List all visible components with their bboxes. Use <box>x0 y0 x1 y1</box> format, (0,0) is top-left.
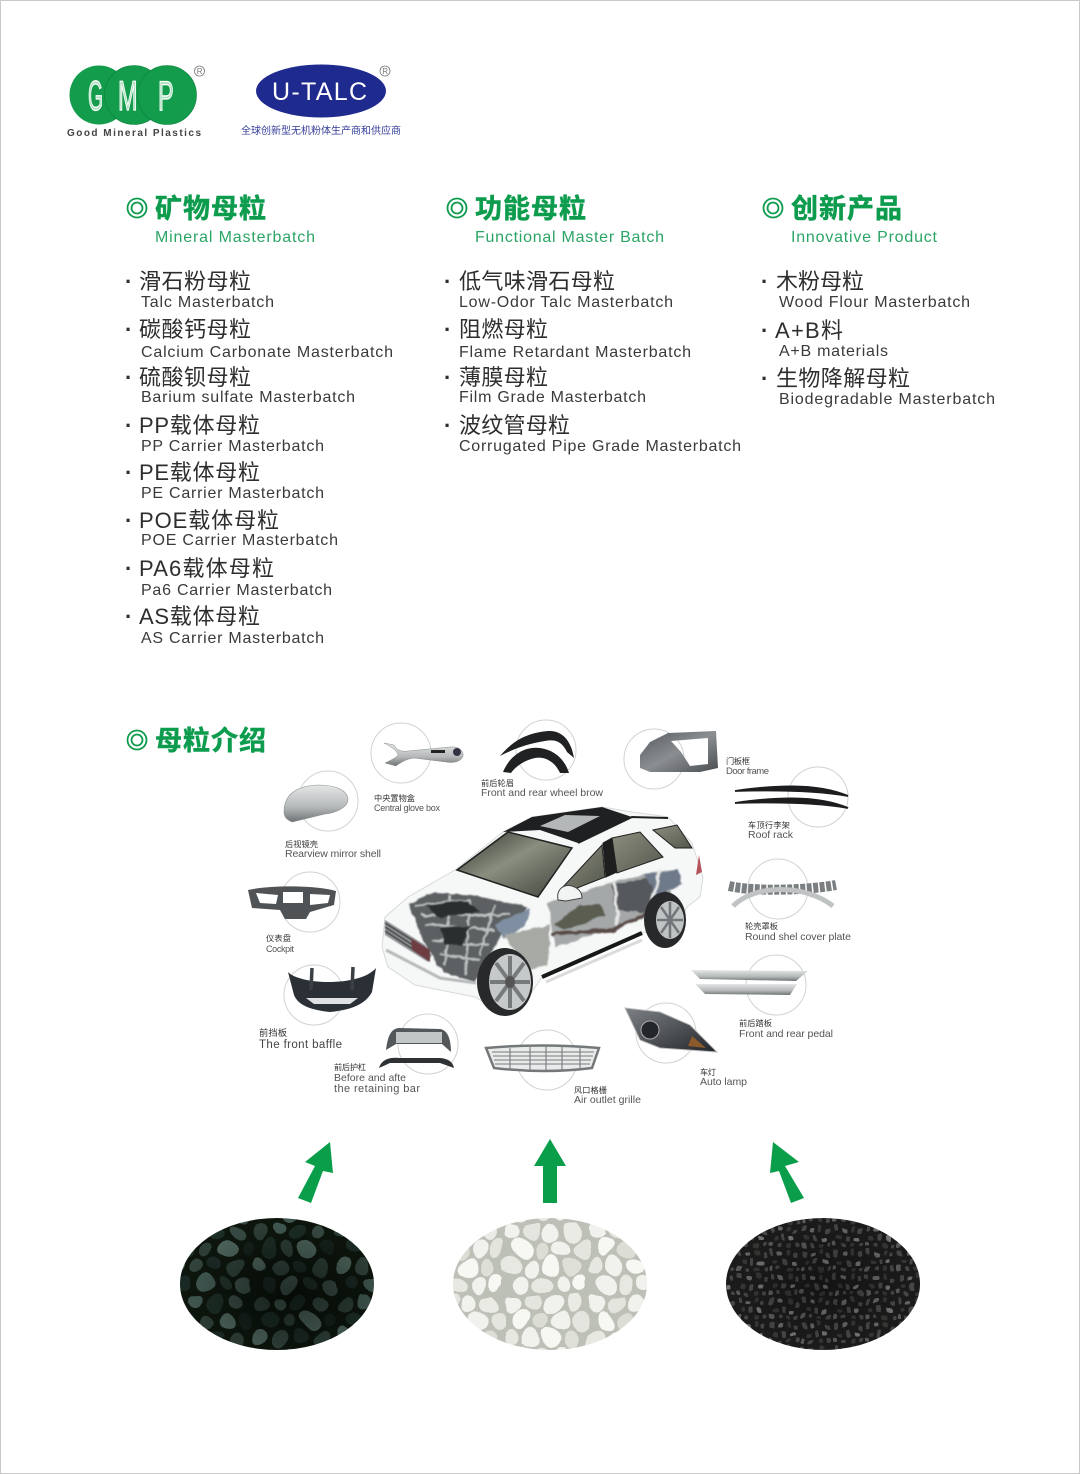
logo: U-TALC: U-TALC <box>272 78 367 106</box>
cabin cutaway <box>548 870 682 947</box>
part: retaining bar <box>334 1014 458 1095</box>
list: functional items: · <box>444 317 451 342</box>
part: retaining bar: 前后护杠 <box>334 1062 366 1072</box>
list: mineral items: Talc Masterbatch <box>141 294 274 311</box>
list: mineral items: AS载体母粒 <box>139 604 260 629</box>
part: door frame: 门板框 <box>726 756 750 766</box>
part: auto lamp: 车灯 <box>700 1067 716 1077</box>
list: innovative items: Wood Flour Masterbatch <box>779 294 970 311</box>
list: mineral items: PP载体母粒 <box>139 413 260 438</box>
list: functional items: · <box>444 413 451 438</box>
list: mineral items: PP Carrier Masterbatch <box>141 438 324 455</box>
running board <box>542 933 642 977</box>
part: auto lamp <box>625 1003 747 1088</box>
list: functional items: · <box>444 269 451 294</box>
list: innovative items: 生物降解母粒 <box>776 366 910 391</box>
list: mineral items: 硫酸钡母粒 <box>139 365 251 390</box>
list: functional items: 阻燃母粒 <box>459 317 548 342</box>
part: rearview mirror shell: Rearview mirror shell <box>285 848 381 860</box>
heading: mineral masterbatch: Mineral Masterbatch <box>155 229 315 246</box>
engine bay <box>408 893 550 982</box>
logo: GMP: M <box>118 73 138 120</box>
list: mineral items: AS Carrier Masterbatch <box>141 630 324 647</box>
part: roof rack: Roof rack <box>748 829 794 841</box>
list: mineral items: · <box>125 508 132 533</box>
logo: GMP <box>67 66 204 139</box>
part: wheel brow <box>481 720 603 799</box>
part: roof rack: 车顶行李架 <box>748 820 790 830</box>
part: wheel brow: 前后轮眉 <box>481 778 514 788</box>
list: mineral items: PA6载体母粒 <box>139 556 274 581</box>
logo: U-TALC: R <box>382 67 388 76</box>
logo: U-TALC <box>241 64 401 137</box>
part: front baffle <box>259 965 376 1051</box>
list: innovative items: · <box>761 318 768 343</box>
list: mineral items: · <box>125 460 132 485</box>
list: innovative items: A+B料 <box>775 318 843 343</box>
pellets: white masterbatch <box>453 1218 647 1350</box>
list: innovative items: Biodegradable Masterbatch <box>779 391 995 408</box>
heading: mineral masterbatch <box>128 194 315 246</box>
rear wheel <box>644 892 686 948</box>
part: central glove box <box>371 723 463 813</box>
part: cockpit <box>248 872 340 954</box>
list: mineral items: POE载体母粒 <box>139 508 279 533</box>
part: roof rack <box>735 767 848 841</box>
part: air outlet grille: Air outlet grille <box>574 1094 641 1106</box>
list: mineral items: PE Carrier Masterbatch <box>141 485 324 502</box>
arrow: center <box>534 1139 566 1203</box>
arrow: right <box>770 1142 804 1203</box>
heading: masterbatch introduction: 母粒介绍 <box>155 726 266 756</box>
part: rearview mirror shell <box>284 771 381 860</box>
list: mineral items: · <box>125 604 132 629</box>
list: mineral items: · <box>125 556 132 581</box>
part: wheel brow: Front and rear wheel brow <box>481 787 603 799</box>
panel: functional master batch <box>444 194 741 455</box>
logo: GMP: P <box>158 73 174 120</box>
part: retaining bar: Before and afte <box>334 1072 406 1084</box>
car cutaway illustration <box>382 807 703 1016</box>
part: air outlet grille <box>486 1030 641 1106</box>
roof and sunroof <box>503 807 668 843</box>
logo: GMP: R <box>197 67 203 76</box>
front wheel <box>477 948 533 1016</box>
list: functional items: 低气味滑石母粒 <box>459 269 615 294</box>
list: mineral items: Pa6 Carrier Masterbatch <box>141 582 332 599</box>
heading: mineral masterbatch: 矿物母粒 <box>155 194 266 224</box>
list: functional items: · <box>444 365 451 390</box>
list: mineral items: · <box>125 317 132 342</box>
part: retaining bar: the retaining bar <box>334 1083 420 1095</box>
pellets: black mineral masterbatch <box>180 1218 374 1350</box>
list: innovative items: · <box>761 366 768 391</box>
list: mineral items: · <box>125 413 132 438</box>
front grille <box>385 920 476 983</box>
list: mineral items: POE Carrier Masterbatch <box>141 532 338 549</box>
logo: GMP: G <box>88 71 103 119</box>
heading: functional master batch <box>448 194 664 246</box>
list: mineral items: · <box>125 269 132 294</box>
panel: innovative product <box>761 194 995 408</box>
part: central glove box: 中央置物盒 <box>374 793 415 803</box>
list: mineral items: Barium sulfate Masterbatch <box>141 389 355 406</box>
heading: innovative product <box>764 194 938 246</box>
part: auto lamp: Auto lamp <box>700 1076 747 1088</box>
list: mineral items: 碳酸钙母粒 <box>139 317 251 342</box>
part: rearview mirror shell: 后视镜壳 <box>285 839 318 849</box>
part: door frame: Door frame <box>726 766 769 777</box>
list: functional items: 波纹管母粒 <box>459 413 570 438</box>
part: central glove box: Central glove box <box>374 803 440 813</box>
pellets: dark small masterbatch <box>726 1218 920 1350</box>
list: functional items <box>444 269 741 455</box>
side windows <box>562 825 692 890</box>
logo: GMP: Good Mineral Plastics <box>67 128 201 139</box>
list: mineral items: · <box>125 365 132 390</box>
list: innovative items: 木粉母粒 <box>776 269 864 294</box>
part: front and rear pedal: 前后踏板 <box>739 1018 772 1028</box>
list: innovative items: · <box>761 269 768 294</box>
list: mineral items: Calcium Carbonate Masterbatch <box>141 344 393 361</box>
list: innovative items: A+B materials <box>779 343 888 360</box>
part: front and rear pedal: Front and rear pedal <box>739 1028 833 1040</box>
part: round shell cover plate: 轮壳罩板 <box>745 921 778 931</box>
part: cockpit: 仪表盘 <box>266 933 291 943</box>
diagram: automotive parts <box>248 720 851 1106</box>
part: round shell cover plate: Round shel cover plate <box>745 931 851 943</box>
list: functional items: Low-Odor Talc Masterbatch <box>459 294 673 311</box>
part: front baffle: 前挡板 <box>259 1027 287 1038</box>
heading: innovative product: 创新产品 <box>791 194 902 224</box>
list: functional items: 薄膜母粒 <box>459 365 548 390</box>
list: functional items: Corrugated Pipe Grade Masterbatch <box>459 438 741 455</box>
part: front baffle: The front baffle <box>259 1039 342 1051</box>
list: mineral items: PE载体母粒 <box>139 460 260 485</box>
heading: innovative product: Innovative Product <box>791 229 938 246</box>
arrow: left <box>298 1142 333 1203</box>
panel: mineral masterbatch <box>125 194 393 647</box>
logo: U-TALC: 全球创新型无机粉体生产商和供应商 <box>241 124 401 137</box>
heading: functional master batch: Functional Master Batch <box>475 229 664 246</box>
list: innovative items <box>761 269 995 408</box>
car body <box>382 807 703 1012</box>
part: air outlet grille: 风口格栅 <box>574 1085 607 1095</box>
heading: functional master batch: 功能母粒 <box>475 194 586 224</box>
windshield <box>457 832 572 897</box>
part: round shell cover plate <box>729 859 851 943</box>
list: functional items: Film Grade Masterbatch <box>459 389 646 406</box>
part: cockpit: Cockpit <box>266 944 294 954</box>
list: functional items: Flame Retardant Masterbatch <box>459 344 691 361</box>
part: door frame <box>624 729 769 789</box>
list: mineral items: 滑石粉母粒 <box>139 269 251 294</box>
door mirror <box>558 886 582 901</box>
part: front and rear pedal <box>691 955 833 1040</box>
list: mineral items <box>125 269 393 647</box>
